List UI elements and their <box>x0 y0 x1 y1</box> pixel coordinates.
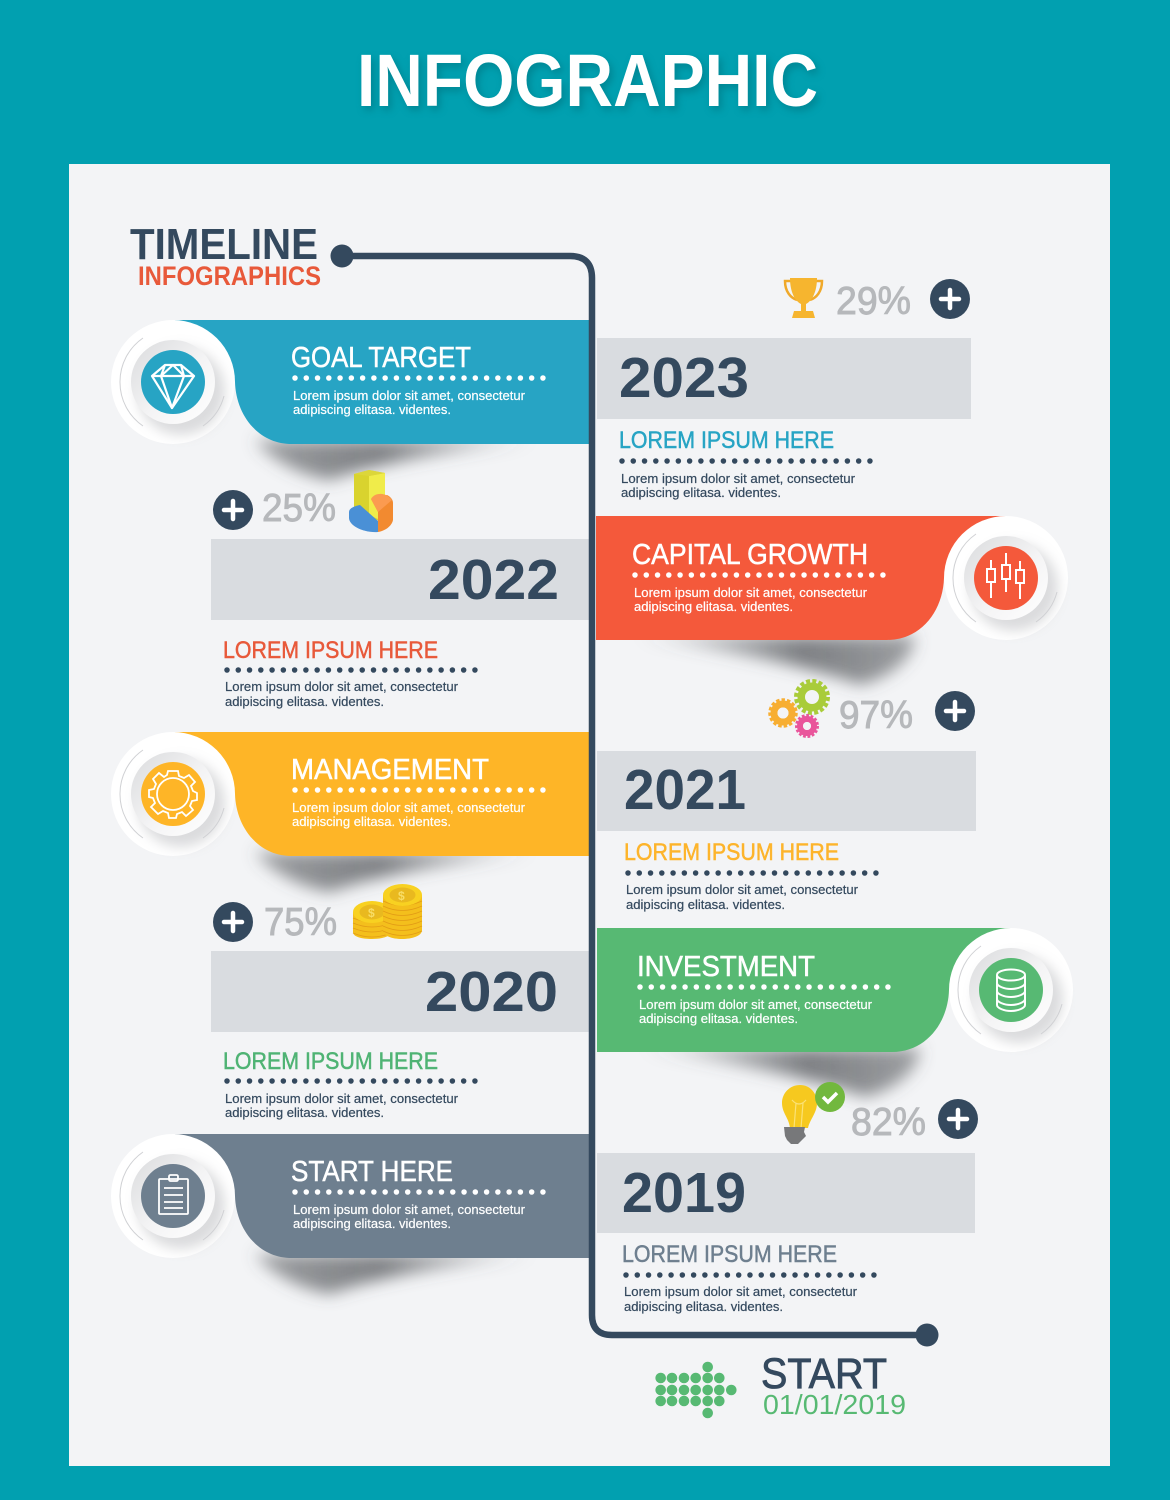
percentage: 75% <box>264 901 337 944</box>
heading: timeline: TIMELINE <box>130 220 318 269</box>
icon: 3d chart <box>349 470 393 532</box>
year: 2022 <box>428 548 559 612</box>
icon: lightbulb with check <box>782 1082 845 1144</box>
text: adipiscing elitasa. videntes. <box>225 695 384 709</box>
icon: trophy <box>785 278 822 318</box>
subheading: LOREM IPSUM HERE <box>223 1048 438 1075</box>
panel: investment <box>597 928 1073 1097</box>
banner text: adipiscing elitasa. videntes. <box>292 815 451 829</box>
text: Lorem ipsum dolor sit amet, consectetur <box>624 1285 857 1299</box>
banner shadow <box>255 440 540 480</box>
year: 2019 <box>622 1161 746 1225</box>
text: adipiscing elitasa. videntes. <box>225 1106 384 1120</box>
year bar <box>597 1153 975 1233</box>
text: Lorem ipsum dolor sit amet, consectetur <box>225 680 458 694</box>
icon: plus <box>935 691 975 731</box>
dotted divider <box>635 572 885 578</box>
badge <box>111 320 235 444</box>
timeline line <box>330 244 938 1346</box>
main panel <box>69 164 1110 1466</box>
banner text: Lorem ipsum dolor sit amet, consectetur <box>634 586 867 600</box>
icon: dotted arrow <box>655 1362 737 1418</box>
subheading: LOREM IPSUM HERE <box>619 427 834 454</box>
badge <box>111 732 235 856</box>
dotted divider <box>626 1272 876 1278</box>
year: 2021 <box>624 758 746 822</box>
banner text: adipiscing elitasa. videntes. <box>639 1012 798 1026</box>
stat: 82% <box>782 1082 978 1144</box>
icon: database <box>997 970 1025 1011</box>
year bar <box>211 951 589 1032</box>
stat: 75% <box>213 884 422 944</box>
banner heading: CAPITAL GROWTH <box>632 539 868 571</box>
banner <box>597 928 1011 1052</box>
text: Lorem ipsum dolor sit amet, consectetur <box>621 472 855 486</box>
stat: 25% <box>213 470 393 532</box>
percentage: 97% <box>839 694 913 737</box>
dotted divider <box>295 375 544 381</box>
year block: 2019 <box>597 1153 975 1314</box>
heading: infographics: INFOGRAPHICS <box>138 261 321 291</box>
title shadow: INFOGRAPHIC <box>360 43 821 126</box>
panel: start here <box>111 1134 589 1294</box>
badge <box>944 516 1068 640</box>
banner shadow <box>635 1048 920 1097</box>
badge <box>949 928 1073 1052</box>
panel heading: timeline infographics <box>130 220 321 291</box>
percentage: 82% <box>851 1101 926 1144</box>
banner shadow <box>630 636 915 685</box>
percentage: 25% <box>262 487 336 530</box>
banner shadow <box>255 852 540 892</box>
banner heading: START HERE <box>291 1156 453 1188</box>
icon: diamond <box>152 365 194 408</box>
icon: plus <box>930 279 970 319</box>
year bar <box>597 338 971 419</box>
start marker <box>655 1350 906 1420</box>
banner <box>596 516 1006 640</box>
dotted divider <box>227 1078 477 1084</box>
icon: plus <box>213 902 253 942</box>
banner heading: INVESTMENT <box>637 951 815 983</box>
banner <box>175 1134 589 1258</box>
banner text: Lorem ipsum dolor sit amet, consectetur <box>293 389 525 403</box>
year block: 2020 <box>211 951 589 1120</box>
dotted divider <box>628 870 878 876</box>
dotted divider <box>640 984 890 990</box>
banner text: adipiscing elitasa. videntes. <box>293 1217 451 1231</box>
banner text: adipiscing elitasa. videntes. <box>634 600 793 614</box>
text: adipiscing elitasa. videntes. <box>624 1300 783 1314</box>
icon: candlesticks <box>987 553 1024 599</box>
year block: 2023 <box>597 338 971 500</box>
text: adipiscing elitasa. videntes. <box>626 898 785 912</box>
icon: coins <box>353 884 422 939</box>
panel: goal target <box>111 320 589 480</box>
text: Lorem ipsum dolor sit amet, consectetur <box>225 1092 458 1106</box>
subheading: LOREM IPSUM HERE <box>622 1241 837 1268</box>
banner <box>175 732 589 856</box>
badge <box>111 1134 235 1258</box>
text: Lorem ipsum dolor sit amet, consectetur <box>626 883 858 897</box>
banner text: Lorem ipsum dolor sit amet, consectetur <box>293 1203 525 1217</box>
banner heading: GOAL TARGET <box>291 342 471 374</box>
dotted divider <box>227 667 477 673</box>
start label: START <box>761 1350 887 1398</box>
banner text: adipiscing elitasa. videntes. <box>293 403 451 417</box>
stat: 97% <box>770 681 975 737</box>
start date: 01/01/2019 <box>763 1389 906 1420</box>
subheading: LOREM IPSUM HERE <box>624 839 839 866</box>
banner text: Lorem ipsum dolor sit amet, consectetur <box>639 998 872 1012</box>
banner text: Lorem ipsum dolor sit amet, consectetur <box>292 801 525 815</box>
year bar <box>211 539 589 620</box>
year bar <box>597 751 976 831</box>
icon: clipboard <box>159 1175 188 1214</box>
percentage: 29% <box>836 280 911 323</box>
banner <box>175 320 589 444</box>
dotted divider <box>622 458 872 464</box>
subheading: LOREM IPSUM HERE <box>223 637 438 664</box>
title: INFOGRAPHIC <box>357 39 818 122</box>
icon: gears <box>770 681 828 736</box>
panel: management <box>111 732 589 892</box>
text: adipiscing elitasa. videntes. <box>621 486 781 500</box>
icon: gear outline <box>149 771 197 818</box>
icon: plus <box>938 1099 978 1139</box>
dotted divider <box>295 787 544 793</box>
year: 2023 <box>619 346 749 410</box>
icon: coins: $ <box>368 906 375 920</box>
year block: 2022 <box>211 539 589 709</box>
icon: plus <box>213 490 253 530</box>
dotted divider <box>295 1189 544 1195</box>
panel: capital growth <box>596 516 1068 685</box>
year block: 2021 <box>597 751 976 912</box>
year: 2020 <box>425 960 558 1024</box>
stat: 29% <box>785 278 970 323</box>
icon: coins: $ <box>398 889 405 903</box>
banner shadow <box>255 1254 540 1294</box>
banner heading: MANAGEMENT <box>291 754 489 786</box>
